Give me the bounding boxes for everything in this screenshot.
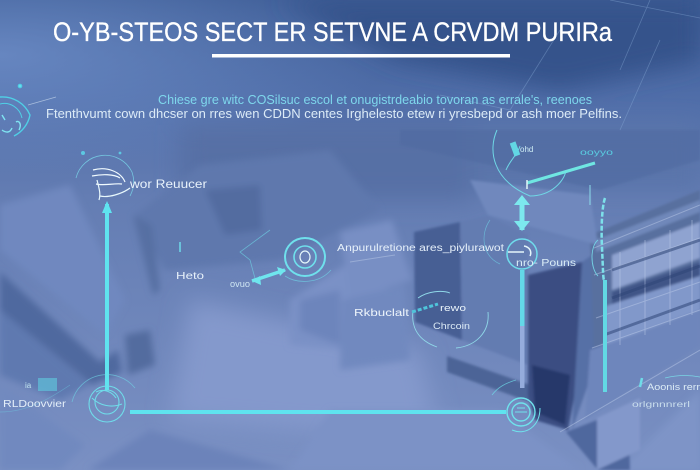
desk block centre xyxy=(135,150,380,270)
node: bottom-left with label: ia xyxy=(25,381,32,390)
left bench xyxy=(0,185,125,335)
area above towers xyxy=(470,180,598,245)
intro text: Ftenthvumt cown dhcser on rres wen CDDN centes Irghelesto etew ri yresbepd or ash moer Pelfins. xyxy=(46,107,622,121)
centre dark tower xyxy=(528,262,584,430)
node: middle label cluster: Rkbuclalt xyxy=(354,308,409,319)
node: top-right satellite icon xyxy=(493,130,614,196)
icon: top-left node xyxy=(0,84,56,136)
left dark tower xyxy=(414,222,462,340)
node: bottom-right label: orlgnnnrerl xyxy=(632,400,690,409)
node: center-left eye icon with Heto labels xyxy=(176,230,331,289)
lower floor shadows xyxy=(88,430,290,470)
right server rack xyxy=(590,190,700,348)
intro text: Chiese gre witc COSilsuc escol et onugistrdeabio tovoran as errale's, reenoes xyxy=(158,93,592,107)
node: bottom-right label: Aoonis rerr xyxy=(647,382,700,392)
node: bottom-right hub xyxy=(492,380,540,432)
node: top-right satellite icon: ohd xyxy=(520,145,533,154)
node: middle label cluster: Chrcoin xyxy=(433,321,470,332)
node: middle label cluster xyxy=(354,291,488,348)
arrow: vertical to bottom hub xyxy=(520,270,524,388)
arrow: horizontal bottom xyxy=(130,410,506,414)
node: Router icon with label: wor Reuucer xyxy=(129,179,207,191)
node: top-right satellite icon: ooyyo xyxy=(580,148,614,157)
wall under rack xyxy=(585,312,700,420)
node: middle label cluster: rewo xyxy=(440,303,466,314)
arrow: double vertical top-right xyxy=(514,195,530,231)
arrow: vertical left xyxy=(102,201,112,390)
node: center-left eye icon with Heto labels: Heto xyxy=(176,270,204,282)
node: center-right hub with labels: Anpurulretione ares_piylurawot xyxy=(337,243,504,254)
node: bottom-left with label: RLDoovvier xyxy=(3,398,67,410)
bottom right stand xyxy=(566,408,630,470)
node: center-left eye icon with Heto labels: ovuo xyxy=(230,279,250,289)
node: Router icon with label xyxy=(76,151,207,200)
node: bottom-left with label xyxy=(0,375,135,422)
node: bottom-right label xyxy=(632,376,700,409)
arrow: right vertical line xyxy=(590,185,607,392)
title underline xyxy=(212,54,510,58)
cabinet xyxy=(290,265,405,350)
node: center-right hub with labels xyxy=(337,220,576,269)
title: O-YB-STEOS SECT ER SETVNE A CRVDM PURIRa xyxy=(53,17,613,47)
node: center-right hub with labels: nro- Pouns xyxy=(516,257,576,269)
intro text xyxy=(46,93,622,121)
title xyxy=(53,17,613,58)
